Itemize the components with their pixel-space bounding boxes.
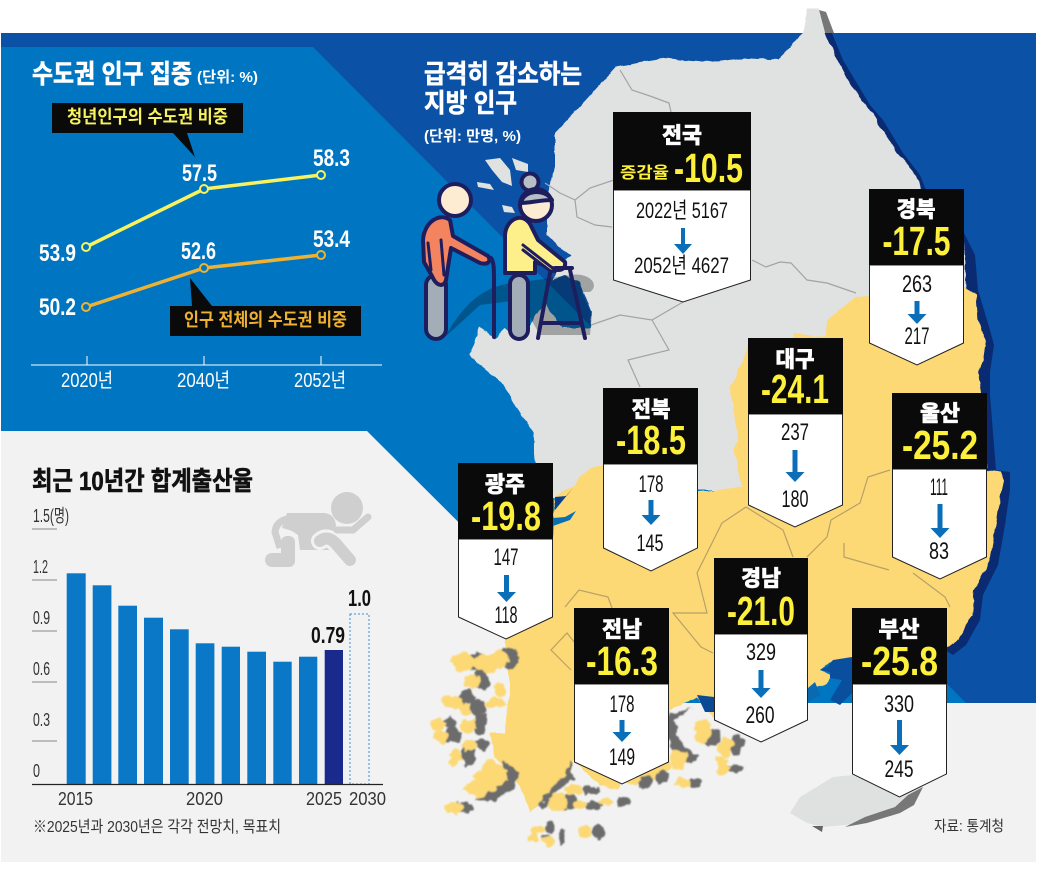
callout: youth population (52, 103, 243, 157)
region card: Ulsan: -25.2 (902, 422, 978, 468)
region card: Busan: 부산 (878, 617, 920, 642)
region card: Jeonnam: 전남 (602, 617, 642, 642)
region card: Jeonbuk: 145 (636, 530, 664, 557)
line: youth population share: 53.9 (39, 240, 76, 267)
region card: Gyeongbuk: -17.5 (882, 218, 950, 264)
icon: crawling baby (265, 492, 368, 567)
region card: nationwide: -10.5 (674, 145, 743, 191)
region card: Ulsan (892, 393, 987, 579)
axis: 2052년 (294, 369, 346, 392)
region card: Jeonnam: 178 (610, 691, 634, 718)
region card: Jeonnam (574, 608, 669, 784)
source credit: 자료: 통계청 (934, 818, 1004, 835)
x axis: 2030 (349, 789, 386, 809)
x axis (32, 784, 386, 809)
region card: Gyeongnam: -21.0 (727, 588, 795, 634)
region card: Gyeongnam: 260 (746, 702, 774, 729)
region card: nationwide: 2052년 4627 (634, 253, 729, 278)
target bar 2030 (350, 614, 369, 784)
axis (31, 356, 382, 392)
walking shadow (445, 275, 594, 337)
Jeju island (790, 775, 923, 832)
region card: Gwangju: -19.8 (471, 493, 541, 539)
panel: capital region concentration line chart (31, 59, 382, 392)
x axis: 2025 (306, 789, 342, 809)
region card: Gwangju (458, 463, 553, 639)
region card: Busan: 330 (884, 691, 914, 718)
x axis: 2015 (58, 789, 93, 809)
region card: Gyeongbuk: 263 (902, 271, 932, 298)
line: total population share: 52.6 (181, 238, 216, 265)
region card: Jeonbuk (603, 388, 698, 571)
region card: Ulsan: 83 (929, 538, 949, 565)
map of South Korea (430, 8, 1010, 846)
region card: Busan (852, 608, 947, 797)
callout: youth population: 청년인구의 수도권 비중 (67, 107, 228, 127)
y axis: 0.6 (33, 659, 50, 679)
region card: Jeonnam: -16.3 (586, 638, 658, 684)
region card: Jeonbuk: 178 (638, 471, 664, 498)
administrative borders (545, 70, 950, 670)
bars (67, 573, 343, 784)
region card: Daegu: 180 (782, 486, 808, 513)
line: total population share: 53.4 (313, 226, 351, 253)
map shadow (819, 10, 834, 33)
bar value labels (311, 585, 371, 648)
region card: Gwangju: 광주 (485, 472, 525, 497)
bar value labels: 1.0 (348, 585, 371, 611)
coast land (469, 8, 1004, 812)
y axis: 0.9 (33, 608, 50, 628)
heading: 수도권 인구 집중 (32, 59, 192, 89)
y axis (32, 506, 69, 781)
southern islands (430, 647, 842, 846)
region card: Jeonnam: 149 (609, 744, 635, 771)
region card: Jeonbuk: 전북 (632, 397, 670, 422)
region card: nationwide: 전국 (662, 123, 702, 148)
y axis: 1.2 (33, 557, 48, 577)
region card: Gyeongnam (714, 558, 808, 742)
heading: rapidly shrinking regional population: 급격히 감소하는 (424, 59, 582, 89)
region card: Gwangju: 118 (494, 602, 518, 629)
region card: Gyeongbuk: 217 (904, 323, 930, 350)
y axis: 0.3 (33, 710, 50, 730)
x axis: 2020 (186, 789, 223, 809)
heading: rapidly shrinking regional population: (단위: 만명, %) (424, 128, 521, 145)
y axis: 0 (33, 761, 40, 781)
callout: total population: 인구 전체의 수도권 비중 (184, 310, 347, 330)
region card: Gyeongbuk (869, 189, 964, 365)
west sea islands (477, 158, 528, 213)
axis: 2020년 (61, 369, 113, 392)
y axis: 1.5(명) (33, 506, 69, 526)
region card: Busan: 245 (884, 756, 914, 783)
inlets and sea patches (553, 488, 966, 712)
icon: elderly couple (423, 174, 594, 339)
grey northern region (469, 8, 966, 500)
region card: Daegu: -24.1 (761, 366, 829, 412)
region card: Ulsan: 울산 (920, 401, 960, 426)
heading: (단위: %) (197, 69, 258, 86)
line: total population share: 50.2 (39, 294, 76, 321)
line: youth population share: 57.5 (182, 160, 217, 187)
line: youth population share (39, 145, 350, 267)
region card: Daegu: 대구 (776, 347, 814, 372)
line: total population share (39, 226, 351, 321)
heading: 최근 10년간 합계출산율 (32, 466, 253, 496)
region card: Busan: -25.8 (861, 638, 938, 684)
region card: nationwide: 증감율 (620, 164, 669, 182)
axis: 2040년 (177, 369, 230, 392)
bar value labels: 0.79 (311, 622, 345, 648)
line: youth population share: 58.3 (313, 145, 350, 172)
region card: Daegu: 237 (781, 419, 809, 446)
callout: total population (170, 278, 361, 336)
yellow southern region (490, 287, 1004, 812)
woman (505, 174, 585, 339)
region card: Ulsan: 111 (930, 474, 948, 501)
heading: rapidly shrinking regional population: 지방 인구 (424, 88, 517, 118)
region card: Daegu (748, 338, 843, 527)
man (423, 184, 494, 339)
region card: Gyeongbuk: 경북 (896, 197, 936, 222)
region card: nationwide (613, 112, 751, 302)
region card: Gwangju: 147 (494, 544, 518, 571)
region card: Jeonbuk: -18.5 (616, 417, 686, 463)
region card: Gyeongnam: 경남 (741, 566, 781, 591)
region card: nationwide: 2022년 5167 (636, 198, 728, 223)
region card: Gyeongnam: 329 (746, 639, 776, 666)
panel: total fertility rate bar chart (32, 466, 386, 836)
footnote: ※2025년과 2030년은 각각 전망치, 목표치 (33, 818, 281, 836)
heading: rapidly shrinking regional population (424, 59, 582, 145)
